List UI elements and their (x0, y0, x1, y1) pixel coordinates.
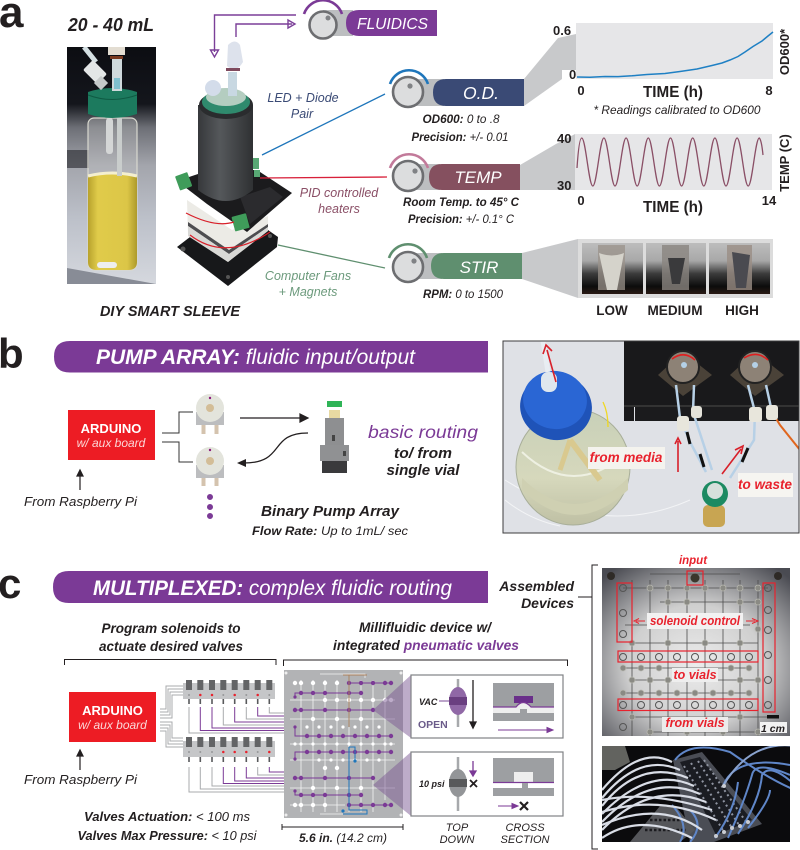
chart: OD600 growth curve: 0 (569, 67, 576, 82)
Arduino box (b): ARDUINO (81, 421, 141, 436)
wires: Arduino to solenoid banks (160, 686, 183, 747)
photo frame (503, 341, 799, 533)
to vials label (672, 668, 718, 682)
label: From Raspberry Pi (c): From Raspberry Pi (24, 772, 138, 787)
chart: OD600 growth curve: 0 (577, 83, 585, 98)
chart: temperature oscillation: TEMP (C) (777, 134, 792, 192)
Arduino box (c): w/ aux board (78, 718, 147, 732)
panel: valve open: OPEN (418, 719, 448, 731)
small vial (703, 505, 725, 527)
pump heads (658, 366, 712, 396)
callout wedge: STIR to photos (522, 239, 578, 298)
arrow: fluidics out to sleeve (210, 15, 296, 57)
white block stack (187, 200, 268, 262)
control: FLUIDICS dial and pill: FLUIDICS (357, 16, 429, 33)
panel: valve closed (411, 752, 563, 816)
specs: O.D. (412, 114, 508, 144)
label: PID controlled heaters: PID controlled (300, 186, 379, 200)
Arduino box (c) (69, 692, 156, 742)
label: top down: TOP (446, 822, 469, 834)
black pump mount (624, 341, 799, 421)
chart: temperature oscillation (557, 131, 792, 216)
control: FLUIDICS dial and pill (304, 0, 437, 38)
photo: DIY smart sleeve device (175, 42, 292, 286)
photo: pump bench: from media (590, 450, 663, 465)
text: binary pump array: Binary Pump Array (261, 504, 400, 520)
blue tubing (672, 745, 795, 842)
chart: temperature oscillation: 30 (557, 178, 571, 193)
connectors: Arduino to pumps (162, 412, 193, 462)
control: TEMP dial and pill: TEMP (454, 168, 502, 187)
specs: TEMP: Room Temp. to 45° C (403, 197, 520, 209)
Arduino box (b) (68, 410, 155, 460)
label: PID controlled heaters: heaters (318, 202, 360, 216)
photo: assembled device top view (602, 568, 790, 736)
photo: assembled device top view: 1 cm (761, 723, 785, 735)
photo: pump bench (503, 341, 800, 533)
label: Computer Fans + Magnets (265, 269, 351, 299)
photo: assembled device with tubing (602, 745, 795, 842)
specs: STIR: RPM: 0 to 1500 (423, 289, 504, 301)
arrow: from vial (237, 433, 308, 467)
text: basic routing (368, 422, 478, 479)
callout wedge: O.D. to chart (524, 34, 576, 106)
control: O.D. dial and pill (390, 70, 524, 107)
arrow: sleeve to fluidics (236, 20, 295, 37)
icon: pump 1 (196, 394, 224, 434)
control: STIR dial and pill (389, 244, 522, 282)
heading: millifluidic device (333, 619, 519, 653)
photo: assembled device top view: from vials (665, 716, 725, 730)
vial volume label: 20 - 40 mL (67, 15, 154, 35)
label: LED + Diode Pair: Pair (291, 107, 314, 121)
fan base (177, 230, 278, 286)
label: Computer Fans + Magnets: Computer Fans (265, 269, 351, 283)
control: O.D. dial and pill: O.D. (463, 83, 499, 103)
tubing (676, 385, 712, 472)
heading: millifluidic device: Millifluidic device w/ (359, 619, 493, 635)
media bottle (516, 409, 630, 525)
from media label (588, 447, 665, 469)
heading: millifluidic device: integrated pneumatic valves (333, 637, 519, 653)
sleeve caption: DIY SMART SLEEVE (100, 303, 241, 320)
specs: O.D.: Precision: +/- 0.01 (412, 132, 508, 144)
photos: stir speeds (578, 239, 773, 298)
chart: OD600 growth curve: TIME (h) (643, 84, 703, 101)
specs: TEMP (403, 197, 520, 226)
chart: temperature oscillation: 40 (557, 131, 571, 146)
chart: temperature oscillation: 14 (762, 193, 777, 208)
label: cross section (501, 822, 549, 846)
panel: valve open: VAC (419, 697, 438, 707)
label: top down (440, 822, 474, 846)
chart: millifluidic device board (284, 670, 403, 818)
icon: single vial (320, 401, 349, 473)
label: cross section: CROSS (505, 822, 545, 834)
text: binary pump array: Flow Rate: Up to 1mL/ sec (252, 524, 408, 538)
specs: O.D.: OD600: 0 to .8 (422, 114, 500, 126)
red region outlines (617, 571, 775, 712)
control: STIR dial and pill: STIR (460, 258, 498, 277)
label: From Raspberry Pi (b): From Raspberry Pi (24, 494, 138, 509)
label: assembled devices (498, 578, 574, 611)
label: top down: DOWN (440, 834, 474, 846)
banner: pump array: PUMP ARRAY: fluidic input/output (96, 346, 416, 369)
banner: multiplexed (53, 571, 488, 603)
panel: valve open (411, 675, 563, 738)
label: cross section: SECTION (501, 834, 549, 846)
photo: glass vial (67, 47, 156, 284)
banner: multiplexed: MULTIPLEXED: complex fluidic routing (93, 577, 452, 600)
connector: red heater line (260, 177, 387, 178)
bracket: device (284, 660, 568, 666)
connector: green fan line (278, 245, 385, 268)
specs: valves: Valves Actuation: < 100 ms (84, 809, 250, 824)
chart: temperature oscillation: TIME (h) (643, 199, 703, 216)
scale: 1 cm (760, 722, 787, 733)
specs: valves: Valves Max Pressure: < 10 psi (78, 828, 258, 843)
bracket: solenoids (64, 660, 276, 665)
arrow: from Raspberry Pi (c) (77, 750, 83, 770)
solenoid bank 1 (183, 680, 275, 704)
label: assembled devices: Assembled (498, 578, 574, 594)
specs: valves (78, 809, 258, 843)
arrow: from Raspberry Pi (b) (77, 470, 83, 490)
chart: OD600 growth curve: OD600* (777, 28, 792, 75)
connector: blue LED line (262, 94, 385, 155)
scale bar (282, 824, 403, 830)
solenoid control label (647, 613, 743, 629)
Arduino box (b): w/ aux board (77, 436, 146, 450)
chart: OD600 growth curve: * Readings calibrated to OD600 (594, 103, 761, 117)
panel: valve closed: 10 psi (419, 779, 445, 789)
green cap (202, 90, 250, 114)
to waste label (738, 473, 793, 497)
blue cap (520, 383, 592, 440)
heading: program solenoids: actuate desired valves (99, 638, 243, 654)
callout wedge: open valve (373, 675, 411, 738)
label: Computer Fans + Magnets: + Magnets (279, 285, 337, 299)
label: input: input (679, 555, 708, 567)
callout wedge: TEMP to chart (520, 134, 575, 190)
text: binary pump array (252, 504, 408, 538)
stir labels: HIGH (725, 303, 759, 318)
label: LED + Diode Pair (267, 91, 339, 121)
stir labels: LOW (596, 303, 628, 318)
chart: OD600 growth curve: 8 (765, 83, 773, 98)
text: basic routing: to/ from (394, 445, 452, 462)
bracket: assembled devices (578, 565, 598, 849)
heading: program solenoids (99, 620, 243, 654)
text: basic routing: basic routing (368, 422, 478, 442)
from vials label (662, 717, 728, 732)
heading: program solenoids: Program solenoids to (102, 620, 241, 636)
black sleeve cylinder (198, 105, 253, 201)
sleeve board (177, 170, 292, 232)
banner: pump array (54, 341, 488, 372)
filters (205, 80, 221, 96)
red flow arrows (543, 345, 556, 382)
text: basic routing: single vial (386, 462, 460, 479)
chart: OD600 growth curve (553, 23, 792, 117)
specs: TEMP: Precision: +/- 0.1° C (408, 214, 515, 226)
photo: assembled device top view: to vials (673, 668, 717, 682)
lower chip (630, 806, 695, 842)
stir labels (596, 303, 759, 318)
white tubing (602, 757, 716, 838)
Arduino box (c): ARDUINO (82, 703, 143, 718)
label: LED + Diode Pair: LED + Diode (267, 91, 339, 105)
tubing: solenoids to device (189, 707, 284, 792)
stir labels: MEDIUM (648, 303, 702, 318)
label: PID controlled heaters (300, 186, 379, 216)
arrow: to vial (240, 414, 308, 422)
control: TEMP dial and pill (390, 154, 520, 191)
chart: temperature oscillation: 0 (577, 193, 585, 208)
photo: assembled device top view: solenoid control (650, 614, 740, 628)
device chip (673, 752, 762, 842)
chart: OD600 growth curve: 0.6 (553, 23, 571, 38)
label: assembled devices: Devices (521, 595, 574, 611)
icon: pump 2 (196, 447, 224, 486)
label: device size: 5.6 in. (14.2 cm) (299, 831, 387, 845)
photo: pump bench: to waste (738, 477, 792, 492)
solenoid bank 2 (183, 737, 275, 762)
callout wedge: closed valve (373, 752, 411, 816)
more pumps dots (207, 497, 213, 516)
